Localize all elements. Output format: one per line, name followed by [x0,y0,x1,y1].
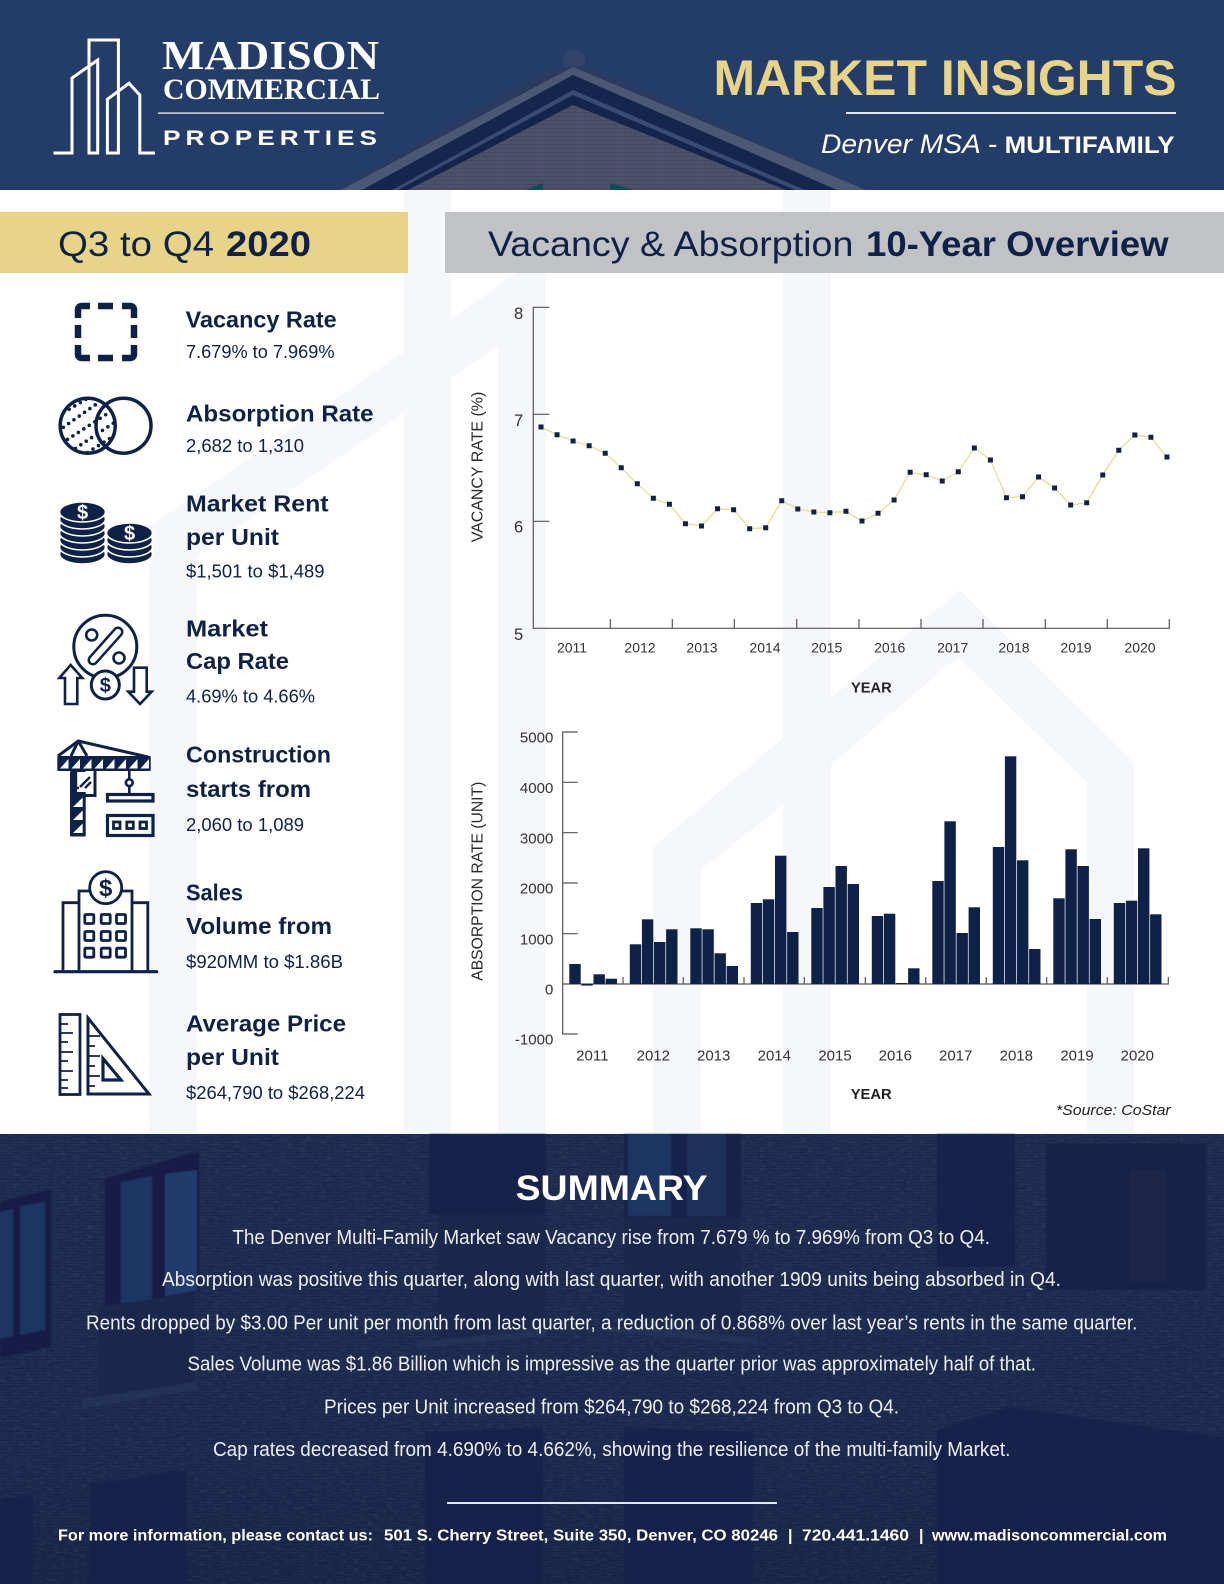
x axis labels: 2018 [1000,1048,1033,1065]
header band [0,0,1224,190]
report subtitle [821,129,1175,159]
logo wordmark: MADISON [162,32,379,78]
y axis [533,307,1169,628]
contact footer: For more information, please contact us: [58,1528,373,1545]
y axis labels [514,305,523,644]
metric: sales volume: $920MM to $1.86B [186,952,343,972]
report subtitle: MULTIFAMILY [1005,132,1175,159]
x axis labels: 2016 [879,1048,912,1065]
x axis labels [576,1048,1154,1065]
icon: tower crane [57,741,153,836]
contact footer: 501 S. Cherry Street, Suite 350, Denver, CO 80246 [384,1528,778,1545]
metric: absorption rate [58,398,374,456]
summary heading: SUMMARY [516,1169,708,1208]
icon: coin stacks: $ [77,502,88,524]
y axis labels: 7 [514,412,523,430]
contact footer: | [788,1528,792,1545]
y axis labels: 6 [514,519,523,537]
x axis labels [557,640,1156,656]
metric: market rent [60,491,329,582]
metric: absorption rate: Absorption Rate [186,401,374,427]
summary text: Sales Volume was $1.86 Billion which is impressive as the quarter prior was approximately half of that. [188,1354,1036,1376]
metric: average price [60,1011,365,1103]
building photo backdrop [0,1134,1224,1584]
y axis labels: 4000 [520,780,553,797]
metric: sales volume [55,872,343,972]
summary text: Cap rates decreased from 4.690% to 4.662%, showing the resilience of the multi-family Market. [213,1439,1010,1461]
x axis labels: 2013 [697,1048,730,1065]
x axis labels: 2019 [1060,640,1092,656]
x axis labels: 2018 [998,640,1030,656]
vacancy data points [538,424,1169,531]
logo wordmark: PROPERTIES [163,127,382,150]
x axis labels: 2013 [686,640,718,656]
logo [54,32,384,153]
metric: cap rate [59,615,315,707]
metric: vacancy rate [78,306,337,362]
summary text: Absorption was positive this quarter, along with last quarter, with another 1909 units being absorbed in Q4. [162,1269,1061,1291]
x axis labels: 2017 [937,640,968,656]
x axis labels: 2012 [624,640,656,656]
metric: vacancy rate: 7.679% to 7.969% [186,342,334,362]
metric: absorption rate: 2,682 to 1,310 [186,436,304,456]
y axis labels: 3000 [520,830,553,847]
x axis labels: 2012 [637,1048,670,1065]
x axis labels: 2020 [1124,640,1156,656]
line chart: vacancy rate [470,305,1169,696]
summary text: The Denver Multi-Family Market saw Vacancy rise from 7.679 % to 7.969% from Q3 to Q4. [232,1227,990,1249]
report title: MARKET INSIGHTS [714,50,1176,106]
source note: *Source: CoStar [1056,1102,1172,1119]
background watermark: building outline [149,190,1134,1133]
x axis labels: 2019 [1060,1048,1094,1065]
y axis labels: 1000 [520,931,553,948]
report subtitle: Denver MSA - [821,129,997,159]
x axis labels: 2011 [576,1048,608,1065]
icon: overlapping circles [58,398,151,456]
icon: coin stacks [60,502,152,564]
metric: construction starts [57,741,331,836]
vacancy line [541,427,1167,529]
icon: percent with arrows: $ [100,675,111,697]
logo icon: skyline [54,40,155,153]
metric: sales volume: Volume from [186,913,332,939]
y axis labels: 0 [545,981,553,998]
x axis labels: 2017 [939,1048,972,1065]
icon: bank building: $ [99,875,113,902]
metric: construction starts: Construction [186,742,331,768]
icon: percent with arrows [59,615,152,704]
y axis title: VACANCY RATE (%) [470,392,487,542]
x axis title: YEAR [851,1086,892,1103]
x axis labels: 2015 [818,1048,852,1065]
y axis labels: -1000 [515,1032,553,1049]
y axis labels: 5000 [520,730,553,747]
building roof photo [337,50,869,190]
icon: ruler and set square [60,1014,149,1094]
y axis labels [515,730,553,1049]
metric: vacancy rate: Vacancy Rate [186,307,337,333]
summary text [86,1227,1137,1461]
logo wordmark [158,32,384,150]
icon: coin stacks: $ [124,523,135,545]
section heading: quarter [0,212,408,273]
x axis labels: 2015 [811,640,842,656]
metric: cap rate: Cap Rate [186,648,289,674]
bars [569,756,1162,986]
section heading: overview [445,212,1224,273]
x axis labels: 2011 [557,640,587,656]
section heading: quarter: Q3 to Q4 [58,225,214,264]
summary text: Prices per Unit increased from $264,790 to $268,224 from Q3 to Q4. [324,1396,899,1418]
section heading: overview: 10-Year Overview [866,225,1169,264]
y axis title: ABSORPTION RATE (UNIT) [470,782,487,981]
bar chart: absorption rate [470,730,1172,1119]
axes [563,732,1168,1034]
metric: market rent: $1,501 to $1,489 [186,562,324,582]
section heading: overview: Vacancy & Absorption [488,225,853,264]
section heading: quarter: 2020 [226,225,311,264]
y axis labels: 8 [514,305,523,323]
metric: average price: Average Price [186,1011,346,1037]
metric: average price: per Unit [186,1044,279,1070]
logo wordmark: COMMERCIAL [163,73,380,106]
icon: dashed square [78,306,134,358]
metric: construction starts: starts from [186,776,311,802]
metric: market rent: Market Rent [186,491,329,517]
metric: average price: $264,790 to $268,224 [186,1083,365,1103]
metric: cap rate: Market [186,616,268,642]
x axis labels: 2014 [758,1048,791,1065]
y axis labels: 5 [514,626,523,644]
metric list [55,306,374,1103]
metric: cap rate: 4.69% to 4.66% [186,687,315,707]
x axis labels: 2020 [1121,1048,1154,1065]
metric: sales volume: Sales [186,880,243,906]
summary text: Rents dropped by $3.00 Per unit per month from last quarter, a reduction of 0.868% over last year’s rents in the same quarter. [86,1312,1137,1334]
contact footer: 720.441.1460 [802,1528,909,1545]
contact footer [58,1528,1167,1545]
icon: bank building [55,872,157,972]
x axis title: YEAR [851,679,892,696]
y axis labels: 2000 [520,881,553,898]
x axis labels: 2016 [874,640,905,656]
summary section [0,1134,1224,1584]
x axis labels: 2014 [749,640,781,656]
metric: market rent: per Unit [186,524,279,550]
contact footer: www.madisoncommercial.com [931,1528,1167,1545]
metric: construction starts: 2,060 to 1,089 [186,815,304,835]
contact footer: | [919,1528,923,1545]
